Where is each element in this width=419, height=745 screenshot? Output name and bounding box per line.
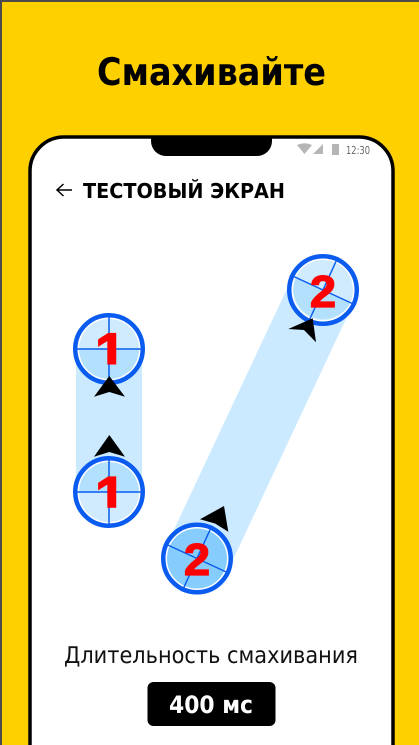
icon: wifi (297, 143, 312, 154)
target 2 bottom (163, 524, 231, 592)
target 2 top (289, 256, 357, 324)
arrow: target 1 top (94, 376, 125, 397)
target 1 bottom (73, 456, 145, 528)
arrow: target 2 top (288, 318, 316, 342)
status bar (297, 143, 370, 157)
target 1 top: 1 (95, 321, 126, 384)
icon: back arrow (57, 184, 72, 196)
arrow: target 2 bottom (200, 506, 228, 532)
swipe path 1 band (76, 349, 142, 492)
icon: battery (332, 144, 339, 155)
target 2 bottom: 2 (184, 534, 210, 585)
swipe path 2 band (167, 276, 353, 572)
arrow: target 1 bottom (94, 435, 125, 457)
phone notch (151, 136, 272, 156)
duration label: Длительность смахивания (64, 643, 358, 669)
target 2 top: 2 (310, 266, 336, 317)
duration value badge (148, 682, 276, 726)
duration value badge: 400 мс (169, 691, 253, 719)
screen heading: ТЕСТОВЫЙ ЭКРАН (83, 178, 285, 203)
title: Смахивайте (97, 50, 326, 94)
phone frame (30, 137, 393, 745)
target 1 bottom: 1 (95, 464, 126, 527)
clock: 12:30 (346, 144, 370, 157)
target 1 top (73, 313, 145, 385)
icon: signal (313, 144, 323, 154)
